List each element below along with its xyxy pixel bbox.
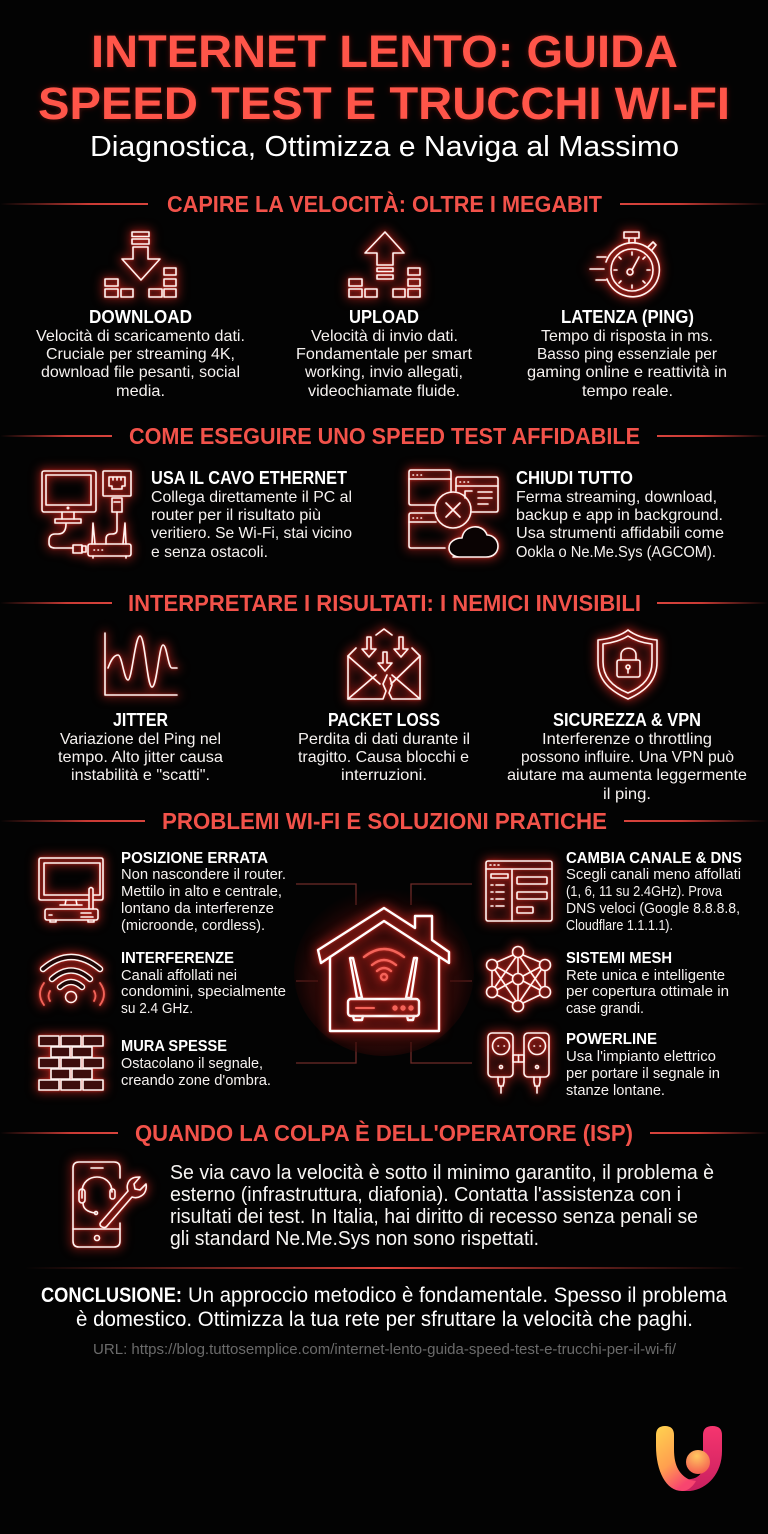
icon: tv and router <box>39 858 103 922</box>
heading: speed test affidabile: COME ESEGUIRE UNO SPEED TEST AFFIDABILE <box>129 423 640 449</box>
column: jitter <box>58 710 223 784</box>
subtitle: Diagnostica, Ottimizza e Naviga al Massimo <box>90 131 679 163</box>
text: powerline: POWERLINE <box>566 1031 657 1048</box>
column: packet loss: Perdita di dati durante il <box>298 731 470 748</box>
column: jitter: JITTER <box>113 710 168 730</box>
column: sicurezza e vpn: Interferenze o throttling <box>542 731 712 748</box>
text: cambia canale e dns <box>566 850 742 934</box>
text: chiudi tutto: backup e app in background. <box>516 507 723 524</box>
text: posizione errata: (microonde, cordless). <box>121 917 265 934</box>
column: sicurezza e vpn: il ping. <box>603 786 651 803</box>
conclusion: è domestico. Ottimizza la tua rete per sfruttare la velocità che paghi. <box>76 1307 693 1331</box>
title: SPEED TEST E TRUCCHI WI-FI <box>38 78 730 129</box>
text: interferenze: INTERFERENZE <box>121 950 234 967</box>
section: problemi wi-fi <box>0 808 768 1099</box>
text: cambia canale e dns: DNS veloci (Google 8.8.8.8, <box>566 900 740 917</box>
source url: URL: https://blog.tuttosemplice.com/internet-lento-guida-speed-test-e-trucchi-per-il-wi-fi/ <box>93 1342 677 1358</box>
text: operatore explanation: gli standard Ne.Me.Sys non sono rispettati. <box>170 1228 539 1250</box>
column: sicurezza e vpn: possono influire. Una VPN può <box>521 749 734 766</box>
text: sistemi mesh: SISTEMI MESH <box>566 950 672 967</box>
text: powerline: stanze lontane. <box>566 1082 665 1099</box>
text: posizione errata: Non nascondere il router. <box>121 866 286 883</box>
column: download: download file pesanti, social <box>41 364 240 381</box>
text: cavo ethernet: veritiero. Se Wi-Fi, stai vicino <box>151 525 352 542</box>
column: upload: working, invio allegati, <box>304 364 463 381</box>
icon: closed windows and cloud <box>409 470 498 557</box>
icon: shield with padlock <box>598 630 657 699</box>
column: packet loss: interruzioni. <box>341 767 427 784</box>
column: latenza: Basso ping essenziale per <box>537 346 718 363</box>
divider <box>25 1267 745 1269</box>
text: cambia canale e dns: (1, 6, 11 su 2.4GHz). Prova <box>566 883 723 900</box>
icon: phone support and wrench <box>73 1162 146 1247</box>
column: latenza: tempo reale. <box>582 383 673 400</box>
text: mura spesse <box>121 1038 271 1089</box>
column: download: Velocità di scaricamento dati. <box>36 328 245 345</box>
section: come eseguire uno speed test <box>0 423 768 561</box>
icon: jitter wave <box>105 633 177 695</box>
text: interferenze: Canali affollati nei <box>121 967 237 984</box>
column: latenza: LATENZA (PING) <box>561 307 694 327</box>
text: cavo ethernet: e senza ostacoli. <box>151 544 268 561</box>
icon: download <box>105 232 176 297</box>
router wifi signal <box>356 949 412 1010</box>
column: latenza <box>527 307 727 400</box>
icon: brick wall <box>39 1036 103 1090</box>
text: chiudi tutto: Ferma streaming, download, <box>516 489 717 506</box>
column: jitter: tempo. Alto jitter causa <box>58 749 223 766</box>
icon: powerline adapters <box>488 1033 549 1093</box>
text: operatore explanation <box>170 1162 714 1250</box>
text: posizione errata: lontano da interferenze <box>121 900 274 917</box>
text: cambia canale e dns: Cloudflare 1.1.1.1). <box>566 917 673 934</box>
column: upload: UPLOAD <box>349 307 419 327</box>
title <box>38 26 730 129</box>
icon: upload <box>349 232 420 297</box>
text: mura spesse: Ostacolano il segnale, <box>121 1055 263 1072</box>
column: upload: videochiamate fluide. <box>308 383 460 400</box>
text: cavo ethernet: router per il risultato più <box>151 507 321 524</box>
text: operatore explanation: esterno (infrastruttura, diafonia). Contatta l'assistenza con i <box>170 1184 681 1206</box>
text: cavo ethernet: Collega direttamente il PC al <box>151 489 352 506</box>
text: powerline: per portare il segnale in <box>566 1065 720 1082</box>
text: cavo ethernet <box>151 468 352 561</box>
text: mura spesse: MURA SPESSE <box>121 1038 227 1055</box>
column: upload: Velocità di invio dati. <box>311 328 458 345</box>
text: chiudi tutto: Usa strumenti affidabili come <box>516 525 724 542</box>
column: latenza: Tempo di risposta in ms. <box>541 328 713 345</box>
text: powerline: Usa l'impianto elettrico <box>566 1048 716 1065</box>
section: capire la velocità <box>0 190 768 400</box>
text: chiudi tutto: Ookla o Ne.Me.Sys (AGCOM). <box>516 544 716 561</box>
heading: operatore isp: QUANDO LA COLPA È DELL'OPERATORE (ISP) <box>135 1119 633 1146</box>
text: posizione errata: POSIZIONE ERRATA <box>121 850 268 867</box>
icon: wifi interference <box>40 957 104 1005</box>
text: interferenze: condomini, specialmente <box>121 983 286 1000</box>
column: packet loss: PACKET LOSS <box>328 710 440 730</box>
icon: dns settings panel <box>486 861 552 921</box>
text: cambia canale e dns: CAMBIA CANALE & DNS <box>566 850 742 867</box>
heading: nemici invisibili: INTERPRETARE I RISULTATI: I NEMICI INVISIBILI <box>128 590 641 616</box>
icon: ethernet setup <box>42 471 131 558</box>
heading: problemi e soluzioni: PROBLEMI WI-FI E SOLUZIONI PRATICHE <box>162 808 607 834</box>
column: download: Cruciale per streaming 4K, <box>46 346 235 363</box>
icon: house with router <box>294 888 474 1056</box>
section: colpa dell'operatore <box>0 1119 768 1250</box>
house outline <box>318 908 449 1031</box>
text: cambia canale e dns: Scegli canali meno affollati <box>566 866 741 883</box>
connector lines <box>296 884 472 1063</box>
text: mura spesse: creando zone d'ombra. <box>121 1072 271 1089</box>
text: posizione errata: Mettilo in alto e centrale, <box>121 883 282 900</box>
text: operatore explanation: risultati dei test. In Italia, hai diritto di recesso senza penali se <box>170 1206 698 1228</box>
column: latenza: gaming online e reattività in <box>527 364 727 381</box>
house glow <box>294 888 474 1056</box>
column: sicurezza e vpn <box>507 710 747 803</box>
text: posizione errata <box>121 850 286 934</box>
column: sicurezza e vpn: SICUREZZA & VPN <box>553 710 701 730</box>
text: interferenze <box>121 950 286 1017</box>
text: interferenze: su 2.4 GHz. <box>121 1000 193 1017</box>
text: sistemi mesh <box>566 950 729 1017</box>
text: chiudi tutto <box>516 468 724 561</box>
conclusion: CONCLUSIONE: <box>41 1283 182 1307</box>
text: sistemi mesh: per copertura ottimale in <box>566 983 729 1000</box>
column: packet loss: tragitto. Causa blocchi e <box>298 749 469 766</box>
text: chiudi tutto: CHIUDI TUTTO <box>516 468 633 488</box>
column: download: DOWNLOAD <box>89 307 192 327</box>
icon: mesh network <box>486 946 550 1012</box>
column: download <box>36 307 245 400</box>
section: interpretare i risultati <box>0 590 768 803</box>
conclusion <box>41 1283 727 1331</box>
column: jitter: instabilità e "scatti". <box>71 767 210 784</box>
icon: broken envelope <box>348 629 420 699</box>
column: packet loss <box>298 710 470 784</box>
column: sicurezza e vpn: aiutare ma aumenta leggermente <box>507 767 747 784</box>
icon: stopwatch <box>590 232 659 297</box>
title: INTERNET LENTO: GUIDA <box>91 26 678 77</box>
logo <box>656 1426 722 1491</box>
column: upload <box>296 307 473 400</box>
column: download: media. <box>116 383 165 400</box>
text: operatore explanation: Se via cavo la velocità è sotto il minimo garantito, il problema è <box>170 1162 714 1184</box>
text: sistemi mesh: case grandi. <box>566 1000 644 1017</box>
column: upload: Fondamentale per smart <box>296 346 473 363</box>
text: powerline <box>566 1031 720 1099</box>
heading: capire la velocità: CAPIRE LA VELOCITÀ: OLTRE I MEGABIT <box>167 190 602 217</box>
text: sistemi mesh: Rete unica e intelligente <box>566 967 725 984</box>
conclusion: Un approccio metodico è fondamentale. Spesso il problema <box>188 1283 727 1307</box>
text: cavo ethernet: USA IL CAVO ETHERNET <box>151 468 347 488</box>
column: jitter: Variazione del Ping nel <box>60 731 221 748</box>
